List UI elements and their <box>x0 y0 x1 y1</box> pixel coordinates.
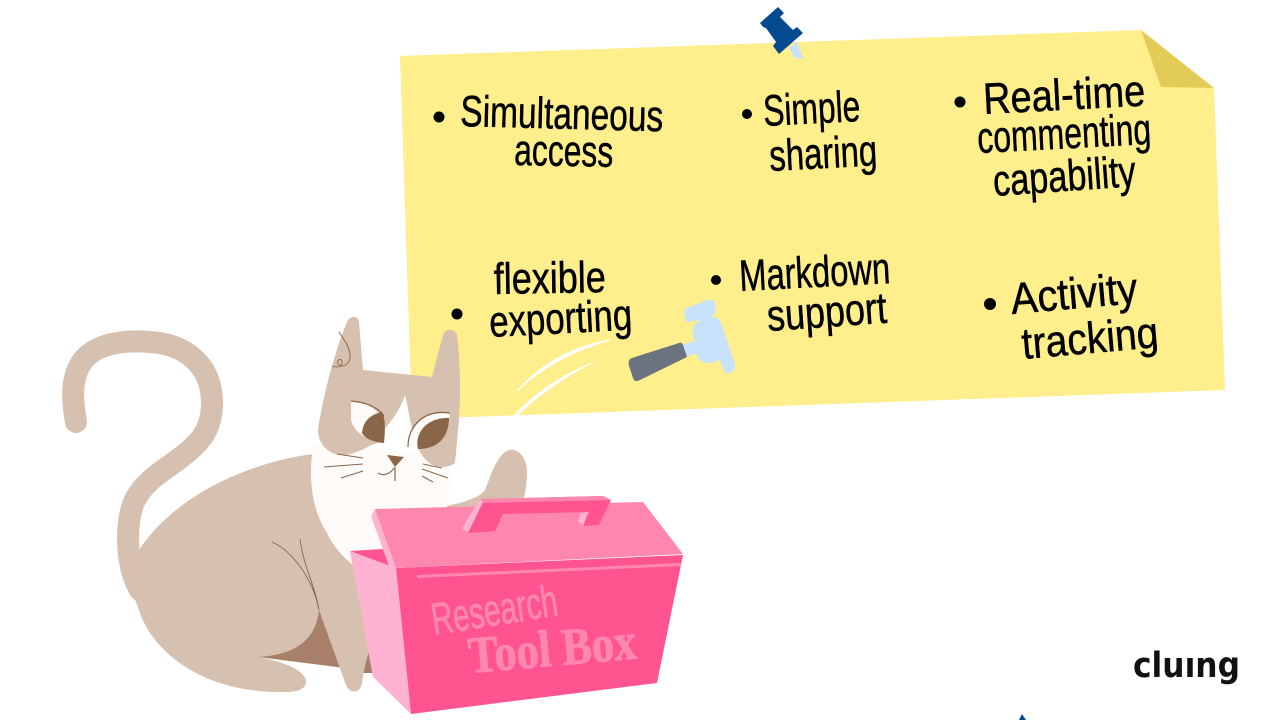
motion lines <box>511 340 610 418</box>
cat right eye <box>408 412 450 449</box>
cat leg lines <box>272 539 319 610</box>
list item: flexible exporting: exporting <box>488 291 633 347</box>
toolbox handle <box>462 496 611 533</box>
list item: Simultaneous access <box>434 87 664 177</box>
cat whiskers <box>324 454 448 482</box>
list item: flexible exporting <box>452 253 633 347</box>
toolbox label: Tool Box: Tool Box <box>466 614 638 685</box>
cat illustration <box>73 317 527 692</box>
list item: flexible exporting: flexible <box>493 253 606 304</box>
list item: Simple sharing <box>742 82 878 181</box>
icon: hammer <box>629 300 735 381</box>
list item: Activity tracking: tracking <box>1020 308 1160 369</box>
list item: Simultaneous access: access <box>514 126 614 177</box>
list item: Simultaneous access: Simultaneous <box>460 87 664 141</box>
toolbox left side <box>350 551 411 714</box>
toolbox lid <box>375 502 683 568</box>
logo: cluing: cluing <box>1133 646 1240 686</box>
toolbox front <box>396 555 683 714</box>
list item: Real-time commenting capability <box>954 67 1152 206</box>
toolbox stripe <box>417 563 681 578</box>
push pin <box>760 7 803 59</box>
cat body <box>133 454 376 692</box>
list item: Real-time commenting capability: Real-time <box>982 67 1146 124</box>
list item: Simple sharing: sharing <box>768 126 878 181</box>
icon: partial pin at bottom edge <box>1019 714 1026 720</box>
cat tail <box>73 341 212 590</box>
cat shadow under body <box>258 605 380 673</box>
list item: Real-time commenting capability: commenting <box>976 105 1152 163</box>
list item: Activity tracking: Activity <box>1009 264 1139 324</box>
toolbox lid edge <box>371 509 396 568</box>
note folded corner <box>1141 30 1214 88</box>
cat left eye <box>351 401 385 443</box>
cat chest <box>311 445 455 572</box>
cat nose and mouth <box>378 455 404 481</box>
list item: Activity tracking <box>984 264 1160 369</box>
sticky note <box>400 30 1225 419</box>
cat head <box>318 317 460 467</box>
toolbox inner flap <box>350 549 389 566</box>
cat ear swirl <box>332 332 350 367</box>
toolbox label: Research: Research <box>428 575 561 645</box>
cat paw <box>440 450 527 520</box>
list item: Simple sharing: Simple <box>762 82 861 136</box>
toolbox <box>350 496 683 714</box>
list item: Markdown support: support <box>765 284 888 341</box>
list item: Markdown support: Markdown <box>738 244 891 301</box>
list item: Markdown support <box>711 244 891 341</box>
list item: Real-time commenting capability: capability <box>991 147 1137 206</box>
